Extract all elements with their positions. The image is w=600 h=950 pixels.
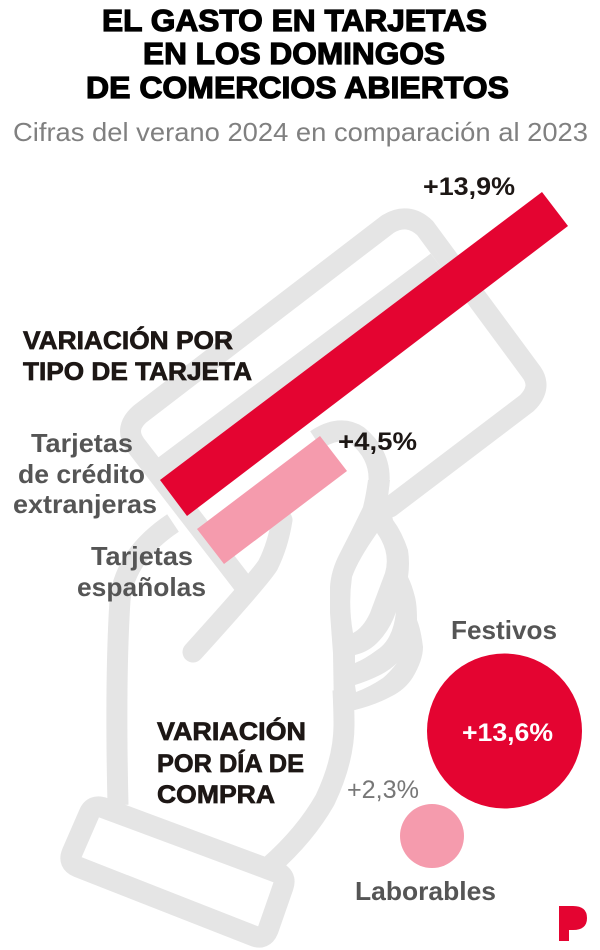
heading: variación por día de compra: [157, 716, 306, 809]
thumb: [316, 431, 379, 490]
label: tarjetas de crédito extranjeras: extranjeras: [13, 489, 157, 519]
label: tarjetas españolas: [77, 541, 206, 602]
heading: variación por día de compra: VARIACIÓN: [157, 716, 306, 746]
heading: variación por tipo de tarjeta: TIPO DE TARJETA: [23, 358, 252, 386]
curled fingers: [330, 480, 423, 712]
circle: festivos +13,6%: [427, 654, 582, 808]
bar: tarjetas españolas +4,5%: [197, 436, 347, 564]
heading: variación por día de compra: COMPRA: [157, 781, 275, 809]
icon: hand holding a card: [71, 219, 536, 937]
value: +4,5%: +4,5%: [338, 428, 417, 456]
finger gaps: [350, 533, 397, 692]
card stripe: [163, 262, 437, 467]
subtitle: Cifras del verano 2024 en comparación al 2023: [13, 117, 588, 147]
circle: festivos +13,6%: +13,6%: [462, 719, 553, 747]
title: DE COMERCIOS ABIERTOS: [86, 70, 509, 105]
label: tarjetas de crédito extranjeras: [13, 428, 157, 519]
hand back: [117, 523, 173, 805]
label: tarjetas españolas: Tarjetas: [91, 541, 193, 571]
logo: P: [559, 906, 587, 941]
label: tarjetas de crédito extranjeras: de crédito: [18, 459, 145, 489]
index finger: [193, 520, 282, 652]
heading: variación por tipo de tarjeta: [23, 325, 252, 386]
label: tarjetas españolas: españolas: [77, 572, 206, 602]
heading: variación por tipo de tarjeta: VARIACIÓN POR: [23, 325, 233, 355]
title: EL GASTO EN TARJETAS: [102, 3, 487, 38]
heading: variación por día de compra: POR DÍA DE: [157, 749, 304, 778]
label: festivos: Festivos: [451, 615, 557, 645]
label: tarjetas de crédito extranjeras: Tarjetas: [31, 428, 133, 458]
cuff: [71, 807, 284, 937]
card outline: [131, 219, 536, 584]
palm: [270, 690, 344, 866]
title: EN LOS DOMINGOS: [143, 36, 445, 71]
value: +13,9%: +13,9%: [423, 173, 515, 201]
circle: laborables: [400, 804, 464, 868]
title: [86, 3, 509, 105]
bar: tarjetas de crédito extranjeras +13,9%: [160, 192, 568, 516]
label: laborables: Laborables: [355, 876, 496, 906]
value: +2,3%: +2,3%: [347, 776, 419, 804]
